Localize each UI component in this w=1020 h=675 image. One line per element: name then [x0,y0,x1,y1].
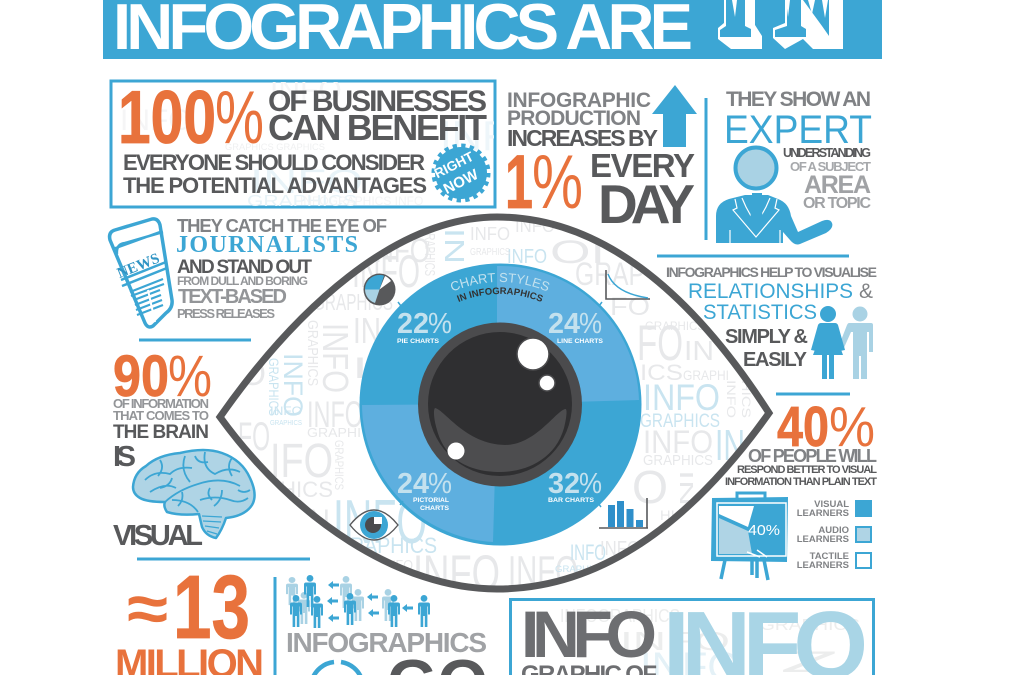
word cloud background: GRAPHICS [470,247,510,258]
panel: 40% of people [711,395,877,580]
word cloud background: NFO [375,232,430,270]
heading: of businesses can benefit: OF BUSINESSES [268,85,487,118]
word cloud background: GRAPHICS [304,320,321,386]
panel: 100% of businesses: INFO [440,112,540,159]
text: of information: THE BRAIN [113,422,209,443]
icon: line chart [606,270,650,299]
icon: IN block letters with ties [718,0,843,49]
word cloud background: RAPHICS [350,533,437,558]
word cloud background: IN [684,335,714,366]
label: 32% bar charts: BAR CHARTS [548,497,595,504]
word cloud background: INFO [515,216,555,236]
word cloud background: IN [353,310,381,351]
label: 24% pictorial charts: CHARTS [420,505,450,512]
stat: 1%: % [532,140,583,225]
panel: production increases [505,85,697,235]
panel: 90% visual [113,344,255,552]
heading: they show an expert: THEY SHOW AN [726,88,871,111]
label: 24% pictorial charts: % [428,468,452,500]
stat: 90% [113,344,212,409]
word cloud background: I [352,352,368,385]
text: infographic production [507,89,658,151]
legend: learners [797,499,872,571]
word cloud background: IFO [270,435,333,488]
text: infographic production: PRODUCTION [507,107,641,130]
icon: newspaper: NEWS [115,251,162,282]
icon: up arrow [652,85,697,147]
word cloud background: INFO [413,545,500,601]
word cloud background: INFO [470,224,510,244]
text: everyone should consider: THE POTENTIAL ADVANTAGES [123,173,427,198]
text: every day: DAY [598,173,695,235]
text: catch the eye of journalists: JOURNALISTS [176,232,358,258]
label: 32% bar charts: % [579,468,602,500]
word cloud background: OI [550,234,605,270]
panel: newspaper journalists [110,215,387,327]
label: 24% pictorial charts: 24 [397,468,429,500]
stat: 40%: % [829,395,875,459]
icon: small eye [350,510,398,540]
panel: 100% of businesses [110,80,496,208]
text: help to visualise: RELATIONSHIPS [688,279,853,303]
stat: 100%: % [215,75,264,159]
text: help to visualise: SIMPLY & [725,326,808,348]
legend: learners: LEARNERS [797,508,849,519]
pupil [418,322,582,486]
word cloud background: GRAPHI [307,425,361,440]
eye [220,216,769,601]
icon: presentation easel: 40% [748,522,780,539]
word cloud background: INFO [278,353,308,417]
text: every day [590,147,695,235]
text: of information [113,396,209,473]
heading: they show an expert [724,88,872,152]
text: of people will respond: OF PEOPLE WILL [748,446,877,466]
word cloud background: INFO [643,377,720,418]
icon: man and woman [811,306,873,379]
icon: pie chart [364,274,396,306]
panel: 100% of businesses: INFO [120,104,192,137]
text: help to visualise: & [859,279,873,303]
word cloud background: GRAPHICS [266,358,282,416]
stat: 1%: 1 [505,140,533,225]
panel: expert [716,88,872,244]
text: help to visualise: STATISTICS [703,300,817,324]
icon: brain [133,450,255,538]
text: understanding: OR TOPIC [803,195,871,212]
panel: 13 million: ≈ [127,571,168,645]
panel: 100% of businesses: GRAPHICS GRAPHICS [225,142,325,152]
legend: learners: LEARNERS [797,534,849,545]
text: understanding: UNDERSTANDING [783,146,871,160]
panel: info graphic of info: GRAPHICS [760,617,860,634]
word cloud background: INFO [724,380,738,418]
word cloud background: INFO [352,246,420,297]
stat: 40%: 40 [777,395,829,459]
eye outline [220,217,769,589]
text: catch the eye of journalists: FROM DULL AND BORING [177,274,308,288]
label: 24% line charts: 24 [548,308,580,340]
legend: learners: VISUAL [814,499,849,510]
word cloud background: INFO [315,323,356,393]
word cloud background: FO [610,293,650,321]
word cloud background: INFO [333,488,427,557]
text: catch the eye of journalists [176,215,387,321]
text: catch the eye of journalists: TEXT-BASED [178,286,287,308]
label: 22% pie charts [397,308,452,345]
word cloud background: IN [715,421,745,470]
icon: bar chart [599,498,648,528]
icon: presentation easel [711,493,788,580]
panel: info graphic of info: INFOGRAPHICS [560,606,680,626]
word cloud background: GRAPHICS [640,411,720,432]
word cloud background: FO [238,415,270,459]
text: of people will respond: INFORMATION THAN PLAIN TEXT [725,476,877,488]
text: infographic production: INCREASES BY [507,125,658,151]
word cloud background: IN [300,504,330,537]
heading: chart styles in infographics: CHART STYLES [451,272,550,291]
heading: of businesses can benefit: CAN BENEFIT [268,107,487,148]
panel: 13 million: 13 [173,558,250,658]
label: 22% pie charts: 22 [397,308,429,340]
word cloud background: GRAP [575,256,645,292]
text: understanding: AREA [804,171,871,199]
word cloud background: IN [439,228,470,264]
word cloud background: GRAPHICS [555,564,605,574]
word cloud background: GRAPHICS [421,226,438,276]
panel: 100% of businesses: INFOGRAPHICS INFO [300,194,423,208]
text: of information: THAT COMES TO [113,408,209,423]
word cloud background: O [632,461,668,513]
text: understanding [783,146,871,212]
heading: chart styles in infographics: IN INFOGRAPHICS [456,287,543,302]
stat: 90%: % [168,344,212,409]
word cloud background: HICS [660,507,695,523]
heading: they show an expert: EXPERT [724,108,872,152]
legend: learners: AUDIO [818,525,849,536]
word cloud background: GRAPHICS [313,289,393,315]
iris quadrants [360,264,642,546]
text: infographics: INFOGRAPHICS [286,627,487,658]
heading: chart styles in infographics [451,272,550,302]
panel: 100% of businesses: INFO [250,163,363,201]
word cloud background: GRAPHICS [608,564,648,574]
label: 22% pie charts: PIE CHARTS [397,338,440,345]
panel: info graphic of info [510,592,874,675]
word cloud background: INFO [600,538,640,560]
panel: relationships and statistics [666,264,877,379]
panel: 13 million [115,558,264,675]
stat: 90%: 90 [113,344,169,409]
word cloud background: INFO [383,557,413,574]
text: everyone should consider: EVERYONE SHOULD CONSIDER [123,150,425,175]
panel: infographics go [286,575,488,675]
word cloud background: FO [637,315,683,371]
word cloud background: INFO [307,394,363,435]
word cloud background: INFO [570,540,606,565]
text: catch the eye of journalists: PRESS RELEASES [177,306,275,321]
stat: 1% [505,140,583,225]
text: dark info: INFO [521,597,657,671]
label: 24% line charts [548,308,604,345]
label: 24% line charts: LINE CHARTS [557,338,604,345]
panel: 100% of businesses: GRAPHICS [247,193,357,210]
text: help to visualise [666,264,877,371]
word cloud background: GRAPHICS [332,440,346,490]
text: of people will respond [725,446,877,488]
word cloud background: ICS [640,360,683,385]
text: of information: IS [113,441,136,473]
text: catch the eye of journalists: THEY CATCH THE EYE OF [177,215,387,236]
word cloud background: HICS [280,477,333,502]
icon: right now badge: NOW [441,166,482,198]
text: infographic production: INFOGRAPHIC [507,89,651,112]
title banner [103,0,882,63]
word cloud background: O [240,355,266,393]
heading: of businesses can benefit [268,85,487,148]
icon: expert person [716,148,832,244]
text: of information: OF INFORMATION [113,396,209,411]
word cloud background [238,216,753,601]
label: 32% bar charts: 32 [548,468,580,500]
legend: learners: TACTILE [810,551,849,562]
word cloud background: GRAPHI [683,367,729,383]
icon: right now badge [432,146,488,200]
label: 24% line charts: % [579,308,602,340]
word cloud background: HICS [739,380,753,418]
label: 32% bar charts [548,468,602,504]
text: help to visualise: EASILY [743,349,808,371]
text: of people will respond: RESPOND BETTER TO VISUAL [737,464,877,476]
text: help to visualise: INFOGRAPHICS HELP TO VISUALISE [666,264,877,280]
word cloud background: GRAPHICS [270,420,302,427]
legend: learners: LEARNERS [797,560,849,571]
icon: circular arrows [312,662,362,675]
word cloud background: INFO [270,404,302,418]
text: every day: EVERY [590,147,695,184]
word cloud background: INFO [643,424,713,460]
text: visual: VISUAL [113,520,203,552]
panel: 100% of businesses: INFO [270,74,342,107]
text: understanding: OF A SUBJECT [790,159,871,174]
word cloud background: INFO [508,547,578,594]
icon: right now badge: RIGHT [432,148,477,181]
label: 22% pie charts: % [428,308,452,340]
word cloud background: GRAPHICS [645,319,705,333]
label: 24% pictorial charts: PICTORIAL [413,497,449,504]
stat: 100%: 100 [118,75,216,159]
word cloud background: GRAPHICS [643,452,713,469]
stat: 40% [777,395,875,459]
ticks [398,302,602,507]
text: catch the eye of journalists: AND STAND OUT [177,257,312,278]
text: everyone should consider [123,150,427,198]
panel: info graphic of info: INFO [620,626,730,656]
iris chart: chart styles [360,264,642,546]
word cloud background: INFO [507,246,547,268]
word cloud background: IN [676,470,696,506]
label: 24% pictorial charts [397,468,452,512]
icon: newspaper [110,219,172,327]
icon: people spreading [286,575,430,628]
